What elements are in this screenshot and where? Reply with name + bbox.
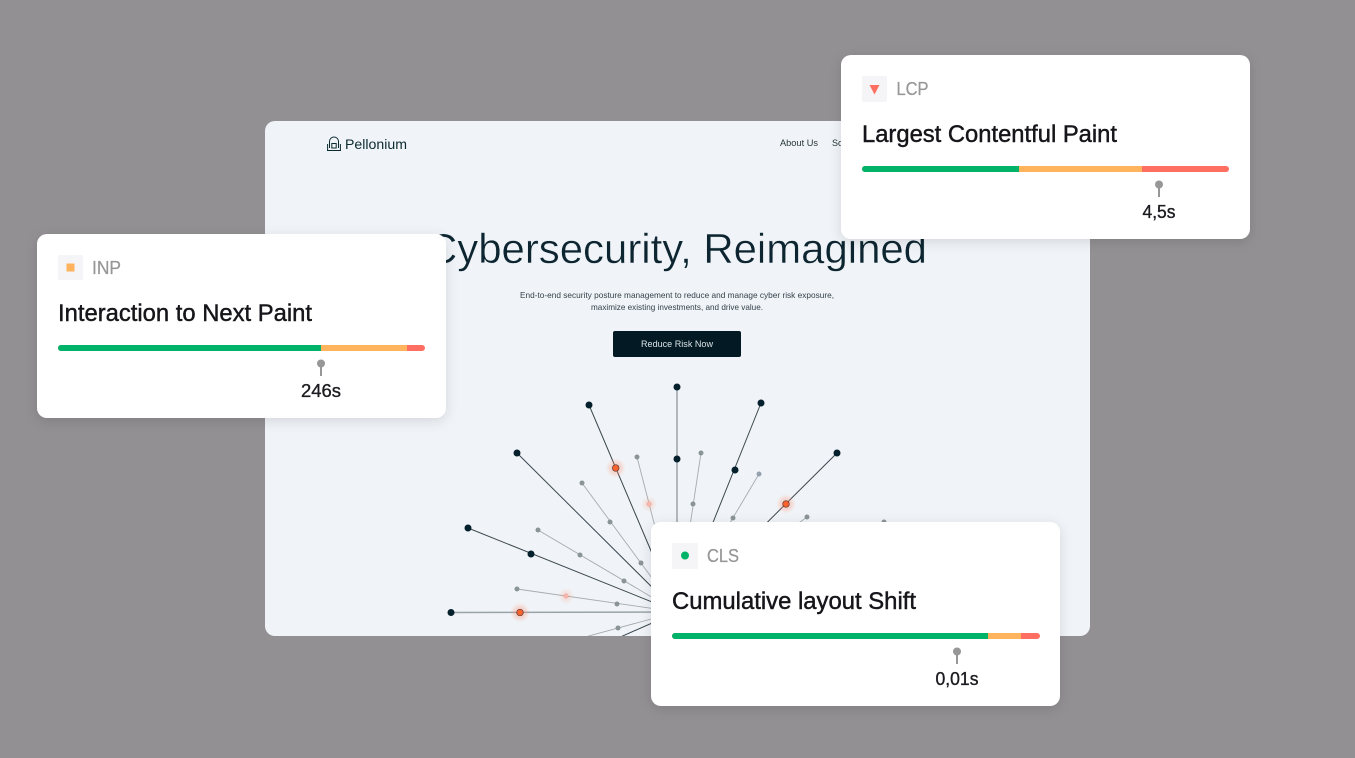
LCP value: 4,5s [1142, 202, 1176, 222]
CLS label: CLS [707, 546, 739, 566]
card: CLS [651, 522, 1060, 706]
LCP label: LCP [896, 79, 928, 99]
icon: orange square [58, 255, 83, 280]
LCP title: Largest Contentful Paint [862, 121, 1117, 148]
CLS marker [953, 648, 961, 664]
call to action button [613, 331, 741, 357]
orange node glows [512, 460, 794, 620]
LCP marker [1155, 180, 1163, 197]
card: LCP [841, 55, 1250, 239]
icon: green dot [672, 543, 698, 569]
CLS score bar [672, 633, 1040, 639]
INP label: INP [92, 258, 121, 278]
INP marker [317, 360, 325, 376]
CLS title: Cumulative layout Shift [672, 588, 916, 615]
card: INP [37, 234, 446, 418]
orange nodes [517, 465, 789, 616]
grey nodes [514, 450, 886, 630]
navigation links [780, 138, 870, 148]
navigation links: Solutions [832, 138, 870, 148]
INP value: 246s [301, 381, 341, 401]
hero description: End-to-end security posture management to reduce and manage cyber risk exposure, [520, 290, 834, 300]
LCP score bar [862, 166, 1229, 172]
INP title: Interaction to Next Paint [58, 300, 312, 327]
radial network graphic [448, 384, 886, 646]
icon: red triangle [862, 76, 887, 102]
dark rays [468, 403, 837, 646]
hero heading: Cybersecurity, Reimagined [427, 225, 927, 272]
pink nodes [564, 502, 651, 598]
dark nodes [448, 384, 840, 616]
light rays [519, 455, 806, 636]
panel: website screenshot [265, 121, 1090, 646]
navigation links: About Us [780, 138, 819, 148]
logo: Pellonium: Pellonium [345, 136, 407, 152]
thick grey rays [451, 387, 677, 612]
hero description [520, 290, 834, 312]
call to action button: Reduce Risk Now [641, 339, 713, 349]
CLS value: 0,01s [936, 669, 978, 689]
INP score bar [58, 345, 425, 351]
hero description: maximize existing investments, and drive value. [591, 302, 763, 312]
